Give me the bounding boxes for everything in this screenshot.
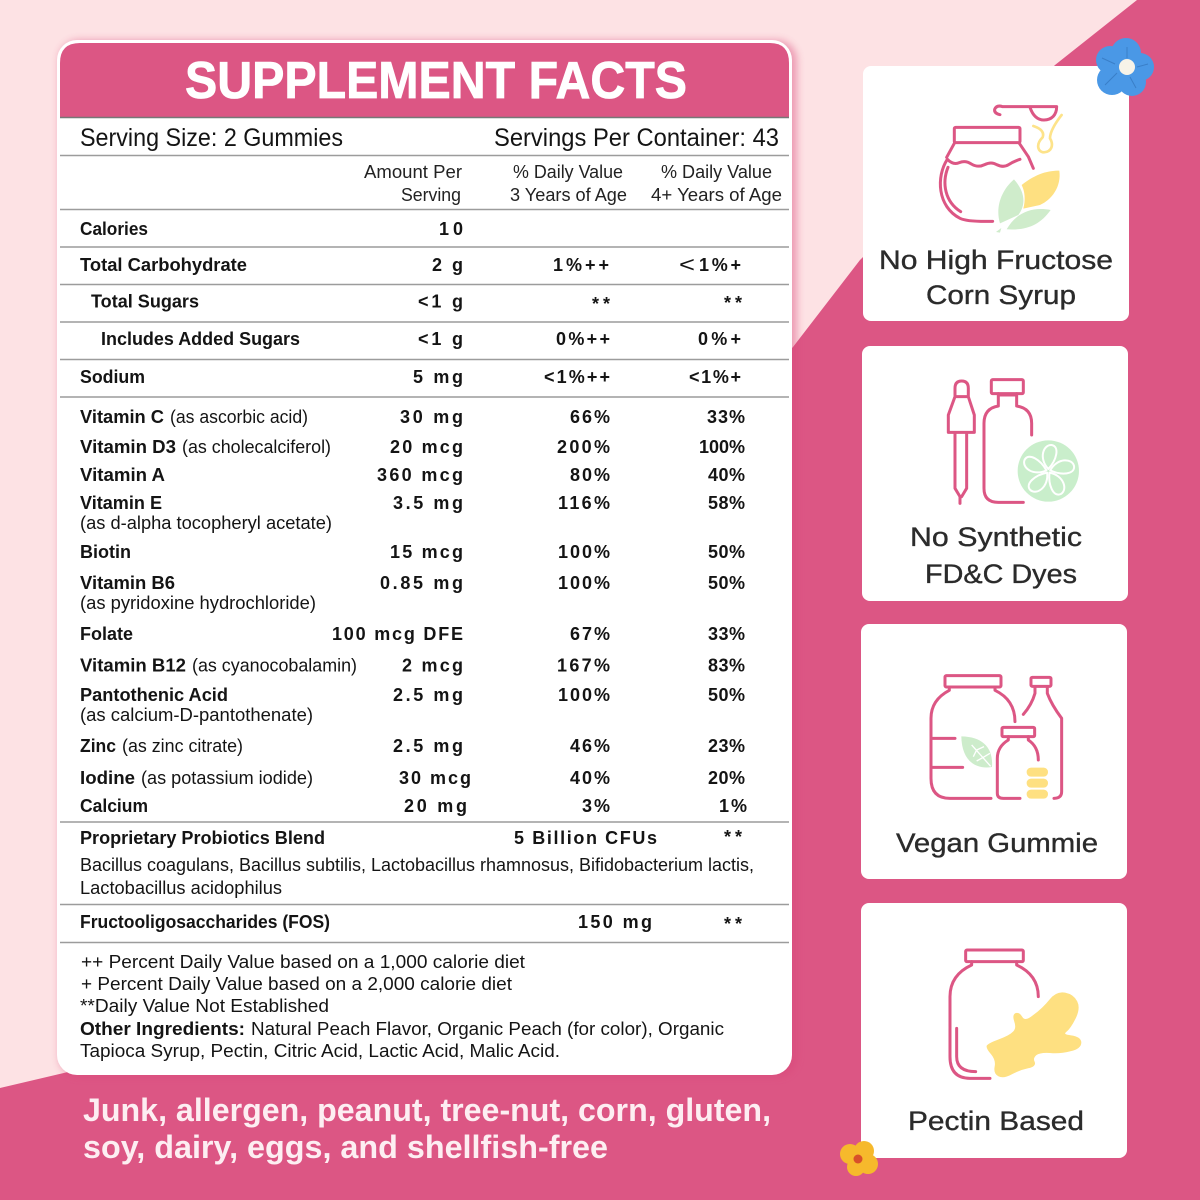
footnotes and other ingredients: **Daily Value Not Established bbox=[80, 996, 329, 1016]
row: sodium bbox=[80, 367, 741, 387]
row: vitamin A: 40% bbox=[708, 465, 745, 485]
label: No High Fructose bbox=[879, 245, 1113, 275]
row: zinc: 2.5 mg bbox=[393, 736, 463, 756]
row: vitamin A: 80% bbox=[570, 465, 610, 485]
row: biotin bbox=[80, 542, 745, 562]
row: pantothenic acid: 50% bbox=[708, 685, 745, 705]
footnotes and other ingredients: Other Ingredients: bbox=[80, 1019, 245, 1039]
row: vitamin D3 bbox=[80, 437, 745, 457]
label: Pectin Based bbox=[908, 1106, 1084, 1136]
serving information: Servings Per Container: 43 bbox=[494, 124, 779, 152]
panel: supplement facts bbox=[57, 40, 797, 1077]
header band with title bbox=[60, 43, 789, 117]
row: total sugars bbox=[91, 292, 742, 314]
label: No Synthetic bbox=[910, 522, 1082, 552]
row: vitamin B12: 83% bbox=[708, 656, 745, 676]
row: folate: 67% bbox=[570, 624, 610, 644]
column headings: 4+ Years of Age bbox=[651, 184, 782, 205]
panel: no high fructose corn syrup bbox=[863, 66, 1129, 321]
icon: jar with ginger bbox=[950, 950, 1081, 1078]
row: vitamin E: 116% bbox=[558, 493, 610, 513]
column headings: % Daily Value bbox=[661, 161, 772, 182]
row: calories: 10 bbox=[439, 219, 463, 239]
row: biotin: 15 mcg bbox=[390, 542, 463, 562]
row: pantothenic acid: (as calcium-D-pantothenate) bbox=[80, 705, 313, 725]
row: includes added sugars: 0%+ bbox=[698, 329, 741, 349]
row: vitamin D3: 20 mcg bbox=[390, 437, 463, 457]
serving information: Serving Size: 2 Gummies bbox=[80, 124, 343, 152]
row: vitamin A: 360 mcg bbox=[377, 465, 463, 485]
row: proprietary probiotics blend: Bacillus coagulans, Bacillus subtilis, Lactobacillus rhamnosus, Bifidobacterium lactis, bbox=[80, 855, 754, 875]
column headings: Serving bbox=[401, 184, 461, 205]
row: folate: 33% bbox=[708, 624, 745, 644]
row: vitamin B6: 0.85 mg bbox=[380, 573, 463, 593]
row: sodium: <1%+ bbox=[689, 367, 741, 387]
row: zinc: (as zinc citrate) bbox=[122, 736, 243, 756]
row: zinc bbox=[80, 736, 745, 756]
row: vitamin C: Vitamin C bbox=[80, 407, 164, 427]
row: includes added sugars: 0%++ bbox=[556, 329, 610, 349]
row: sodium: Sodium bbox=[80, 367, 145, 387]
row: total sugars: <1 g bbox=[418, 292, 463, 312]
icon: blue flower bbox=[1096, 38, 1154, 96]
panel: no synthetic dyes bbox=[862, 346, 1128, 601]
row: pantothenic acid: 2.5 mg bbox=[393, 685, 463, 705]
row: vitamin B12: 167% bbox=[557, 656, 610, 676]
label: FD&C Dyes bbox=[925, 559, 1077, 589]
free-from statement bbox=[83, 1092, 771, 1165]
row: proprietary probiotics blend: Lactobacillus acidophilus bbox=[80, 878, 282, 898]
row: iodine bbox=[80, 768, 745, 788]
column headings: % Daily Value bbox=[513, 161, 623, 182]
row: calcium: Calcium bbox=[80, 796, 148, 816]
row: biotin: 50% bbox=[708, 542, 745, 562]
row: pantothenic acid: Pantothenic Acid bbox=[80, 685, 228, 705]
row: total sugars: ** bbox=[592, 294, 610, 314]
row: vitamin B6: Vitamin B6 bbox=[80, 573, 175, 593]
row: vitamin C: 66% bbox=[570, 407, 610, 427]
row: total sugars: ** bbox=[724, 293, 742, 313]
row: vitamin B6: 50% bbox=[708, 573, 745, 593]
label bbox=[879, 245, 1113, 310]
row: biotin: 100% bbox=[558, 542, 610, 562]
row: vitamin B6: 100% bbox=[558, 573, 610, 593]
row: iodine: 40% bbox=[570, 768, 610, 788]
row: total carbohydrate: 1%++ bbox=[553, 255, 609, 275]
row: calories bbox=[80, 219, 463, 239]
row: calories: Calories bbox=[80, 219, 148, 239]
row: fructooligosaccharides: 150 mg bbox=[578, 912, 652, 932]
label bbox=[910, 522, 1082, 589]
row: vitamin C: 30 mg bbox=[400, 407, 463, 427]
row: proprietary probiotics blend bbox=[80, 827, 754, 898]
row: vitamin B6: (as pyridoxine hydrochloride) bbox=[80, 593, 316, 613]
row: iodine: 20% bbox=[708, 768, 745, 788]
row: includes added sugars: Includes Added Sugars bbox=[101, 329, 300, 349]
row: vitamin C: (as ascorbic acid) bbox=[170, 407, 308, 427]
row: proprietary probiotics blend: ** bbox=[724, 827, 742, 847]
row: total carbohydrate: < bbox=[679, 252, 695, 277]
panel: vegan gummie bbox=[861, 624, 1127, 879]
row: vitamin E: Vitamin E bbox=[80, 493, 162, 513]
row: proprietary probiotics blend: 5 Billion CFUs bbox=[514, 828, 657, 848]
row: proprietary probiotics blend: Proprietary Probiotics Blend bbox=[80, 828, 325, 848]
row: total carbohydrate: 1%+ bbox=[699, 255, 741, 275]
header band with title: SUPPLEMENT FACTS bbox=[185, 51, 687, 109]
icon: jars with leaf and gummies bbox=[931, 676, 1062, 799]
row: folate bbox=[80, 624, 745, 644]
row: vitamin E: (as d-alpha tocopheryl acetate) bbox=[80, 513, 332, 533]
row: fructooligosaccharides bbox=[80, 912, 742, 934]
row: folate: 100 mcg DFE bbox=[332, 624, 463, 644]
row: vitamin D3: (as cholecalciferol) bbox=[182, 437, 331, 457]
icon: yellow flower bbox=[840, 1141, 878, 1176]
row: vitamin A bbox=[80, 465, 745, 485]
label: Vegan Gummie bbox=[896, 828, 1098, 858]
row: total carbohydrate: Total Carbohydrate bbox=[80, 255, 247, 275]
row: calcium: 1% bbox=[719, 796, 747, 816]
row: sodium: <1%++ bbox=[544, 367, 610, 387]
row: vitamin A: Vitamin A bbox=[80, 465, 165, 485]
row: folate: Folate bbox=[80, 624, 133, 644]
row: total carbohydrate bbox=[80, 252, 741, 277]
row: vitamin E: 58% bbox=[708, 493, 745, 513]
row: vitamin C bbox=[80, 407, 745, 427]
row: vitamin B12 bbox=[80, 656, 745, 676]
footnotes and other ingredients bbox=[80, 952, 724, 1061]
row: pantothenic acid bbox=[80, 685, 745, 725]
row: sodium: 5 mg bbox=[413, 367, 463, 387]
serving information bbox=[80, 124, 779, 152]
row: vitamin B12: Vitamin B12 bbox=[80, 656, 186, 676]
row: iodine: 30 mcg bbox=[399, 768, 471, 788]
row: fructooligosaccharides: ** bbox=[724, 914, 742, 934]
row: vitamin B12: (as cyanocobalamin) bbox=[192, 656, 357, 676]
column headings bbox=[364, 161, 782, 205]
footnotes and other ingredients: + Percent Daily Value based on a 2,000 calorie diet bbox=[81, 974, 512, 994]
row: calcium: 20 mg bbox=[404, 796, 467, 816]
label: Corn Syrup bbox=[926, 280, 1076, 310]
row: zinc: 46% bbox=[570, 736, 610, 756]
column headings: Amount Per bbox=[364, 161, 462, 182]
icon: honey jar with corn bbox=[940, 106, 1062, 233]
row: iodine: (as potassium iodide) bbox=[141, 768, 313, 788]
footnotes and other ingredients: Natural Peach Flavor, Organic Peach (for color), Organic bbox=[251, 1019, 724, 1039]
row: zinc: Zinc bbox=[80, 736, 116, 756]
row: vitamin B6 bbox=[80, 573, 745, 613]
column headings: 3 Years of Age bbox=[510, 184, 627, 205]
icon: dropper and bottle bbox=[948, 380, 1079, 503]
free-from statement: Junk, allergen, peanut, tree-nut, corn, gluten, bbox=[83, 1092, 771, 1128]
row: vitamin E bbox=[80, 493, 745, 533]
row: total carbohydrate: 2 g bbox=[432, 255, 463, 275]
row: biotin: Biotin bbox=[80, 542, 131, 562]
footnotes and other ingredients: ++ Percent Daily Value based on a 1,000 calorie diet bbox=[81, 952, 525, 972]
row: vitamin B12: 2 mcg bbox=[402, 656, 463, 676]
row: includes added sugars bbox=[101, 329, 741, 349]
row: vitamin C: 33% bbox=[707, 407, 745, 427]
row: calcium bbox=[80, 796, 747, 816]
row: vitamin D3: Vitamin D3 bbox=[80, 437, 176, 457]
free-from statement: soy, dairy, eggs, and shellfish-free bbox=[83, 1129, 608, 1165]
footnotes and other ingredients: Tapioca Syrup, Pectin, Citric Acid, Lactic Acid, Malic Acid. bbox=[80, 1041, 560, 1061]
row: zinc: 23% bbox=[708, 736, 745, 756]
row: vitamin D3: 100% bbox=[699, 437, 745, 457]
row: total sugars: Total Sugars bbox=[91, 292, 199, 312]
row: iodine: Iodine bbox=[80, 768, 135, 788]
panel: pectin based bbox=[861, 903, 1127, 1158]
row: fructooligosaccharides: Fructooligosaccharides (FOS) bbox=[80, 912, 330, 932]
row: calcium: 3% bbox=[582, 796, 610, 816]
row: vitamin E: 3.5 mg bbox=[393, 493, 463, 513]
row: includes added sugars: <1 g bbox=[418, 329, 463, 349]
row: pantothenic acid: 100% bbox=[558, 685, 610, 705]
row: vitamin D3: 200% bbox=[557, 437, 610, 457]
